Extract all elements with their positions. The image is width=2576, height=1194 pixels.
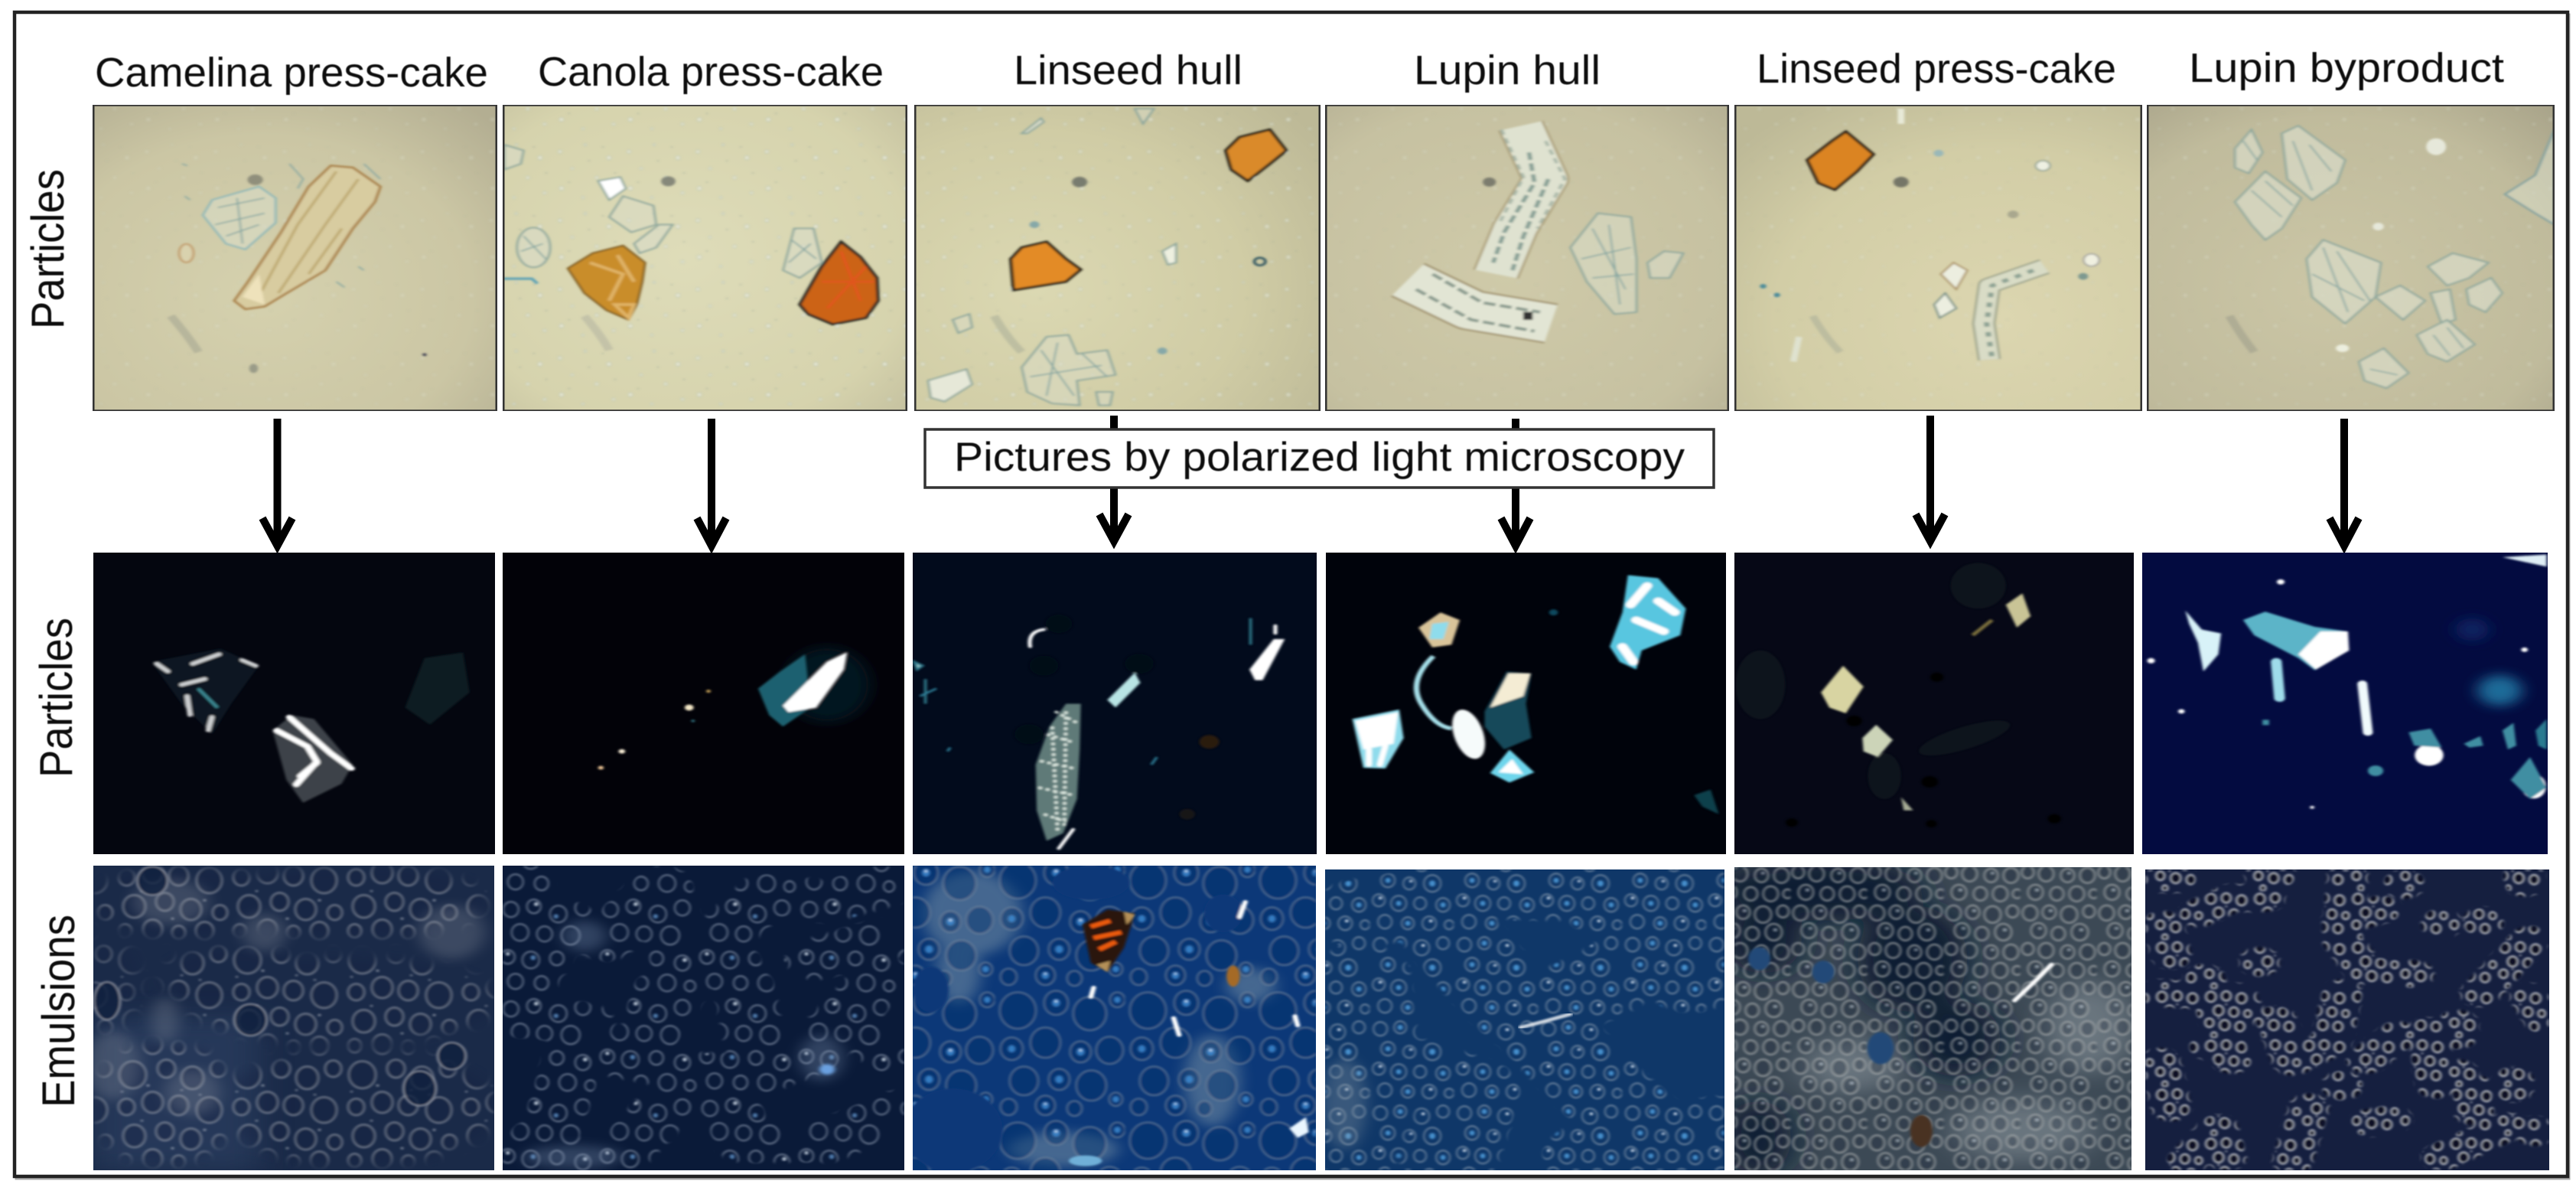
particle: central crystal [272, 715, 353, 803]
particle: orange [1807, 132, 1874, 190]
row label: Particles (polarized): Particles [31, 618, 82, 778]
photo: Lupin byproduct particles bright field [2147, 105, 2555, 411]
emulsion droplets [503, 866, 904, 1170]
photo: Lupin hull particles bright field [1325, 105, 1729, 411]
photo: Lupin hull particles polarized [1326, 553, 1726, 854]
blue voids [1748, 948, 1894, 1065]
row label: Emulsions: Emulsions [33, 915, 84, 1108]
row label: Particles (bright field): Particles [22, 169, 73, 329]
particle: orange upper right [1226, 129, 1286, 181]
title: Lupin hull: Lupin hull [1414, 47, 1601, 93]
photo: Camelina particles polarized [93, 553, 495, 854]
particle: bright crystal [758, 652, 847, 726]
arrow: Linseed press-cake [1916, 416, 1945, 541]
particle: lower cluster [2307, 240, 2503, 388]
particle: left bright block [1353, 710, 1404, 768]
particle: white blobs [2147, 579, 2546, 809]
photo: Lupin byproduct particles polarized [2142, 553, 2548, 854]
dark regions [1714, 860, 2001, 1176]
particle: curved fibre [1416, 656, 1451, 729]
arrow: Lupin hull [1501, 419, 1530, 546]
particle: right fragment [1571, 214, 1683, 314]
particle: small brown inclusion [1226, 965, 1240, 987]
title: Canola press-cake: Canola press-cake [538, 49, 884, 95]
photo: Canola emulsion [503, 866, 904, 1170]
particle: yellow crystal [1821, 666, 1864, 713]
arrow: Linseed hull [1099, 416, 1128, 541]
particle: vertical bar [2363, 684, 2368, 732]
photo: Camelina emulsion [93, 866, 494, 1170]
title: Linseed hull: Linseed hull [1014, 47, 1242, 93]
photo: Linseed hull particles bright field [914, 105, 1321, 411]
arrow: Camelina [262, 419, 292, 546]
particle: faint crystal [405, 652, 470, 725]
particle: white oval [1447, 707, 1490, 761]
photo: Lupin byproduct emulsion [2145, 869, 2549, 1170]
particle: pale fragments [928, 109, 1265, 406]
title: Camelina press-cake: Camelina press-cake [95, 50, 488, 96]
photo: Camelina particles bright field [93, 105, 497, 411]
particle: upper cluster [2235, 126, 2345, 240]
arrow: Canola [697, 419, 726, 546]
photo: Linseed hull particles polarized [913, 553, 1317, 854]
particle: bright sliver [1249, 639, 1285, 680]
particle: pale fragments [503, 145, 822, 284]
particle: fragment [203, 187, 275, 250]
particle: upper round [1418, 612, 1460, 648]
particle: large bright crystal [2243, 612, 2349, 670]
particle: bright specks [598, 690, 711, 770]
particle: orange striped inclusion [1083, 909, 1135, 972]
fog patches [85, 879, 485, 1115]
fog and streak [1322, 1014, 1570, 1150]
fog patches [923, 871, 1275, 1166]
fog patch [523, 921, 844, 1169]
emulsion droplets [1325, 869, 1724, 1170]
emulsion droplets [913, 866, 1316, 1170]
emulsion droplets [1734, 867, 2131, 1170]
particle: teal sliver [1107, 673, 1140, 707]
particle: top crystal [2006, 593, 2031, 628]
particle: lower bone shape [1408, 274, 1551, 331]
particle: left crystal [151, 648, 259, 734]
particle: right edge fragment [2505, 129, 2555, 225]
arrows [262, 416, 2359, 546]
bright streaks [1069, 902, 1309, 1166]
particle: central bundle [1484, 671, 1534, 782]
title: Lupin byproduct: Lupin byproduct [2189, 45, 2504, 91]
particle: orange left [1011, 242, 1081, 290]
particle: pale crystal [1862, 725, 1893, 757]
photo: Linseed press-cake particles bright field [1734, 105, 2142, 411]
emulsion droplets [93, 866, 494, 1170]
brown inclusion [1910, 1115, 1933, 1147]
photo: Lupin hull emulsion [1325, 869, 1724, 1170]
photo: Canola particles polarized [503, 553, 904, 854]
particle: elongated hull [234, 166, 380, 309]
particle: speckled oval [1036, 703, 1081, 841]
emulsion droplets [2145, 869, 2549, 1170]
column titles [95, 45, 2504, 96]
particle: amber [568, 246, 645, 320]
bright streak [2014, 964, 2051, 1000]
photo: Canola particles bright field [503, 105, 907, 411]
particle: left streak [2185, 611, 2221, 671]
particle: teal marks [2262, 719, 2547, 799]
photo: Linseed hull emulsion [904, 866, 1316, 1172]
callout: polarized light microscopy [925, 429, 1714, 488]
photo: Linseed press-cake particles polarized [1734, 553, 2134, 854]
particle: upper right crystal [1610, 575, 1685, 670]
particle: pale fragments [1760, 109, 2099, 361]
particle: orange [800, 242, 878, 325]
title: Linseed press-cake: Linseed press-cake [1757, 46, 2116, 92]
arrow: Lupin byproduct [2330, 419, 2359, 546]
particle: specks [179, 164, 380, 288]
photo: Linseed press-cake emulsion [1714, 860, 2133, 1176]
row labels [22, 169, 84, 1108]
particle: upper bone shape [1493, 126, 1565, 274]
callout: polarized light microscopy: Pictures by polarized light microscopy [954, 435, 1685, 480]
particle: small marks [914, 618, 1275, 849]
